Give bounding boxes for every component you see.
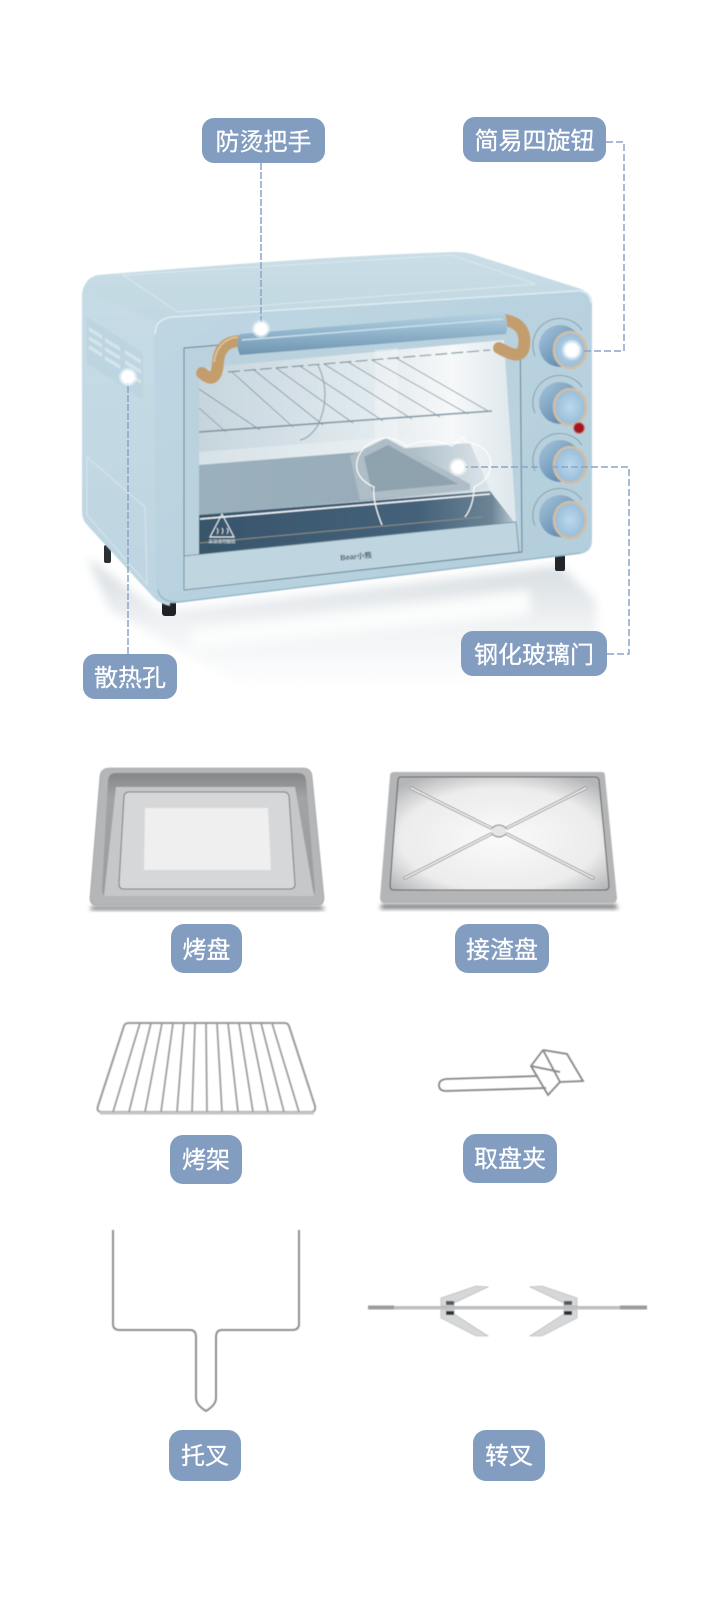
door glass (199, 340, 516, 556)
callout: heat-proof handle: 防烫把手 (216, 129, 312, 156)
label: pan clip: 取盘夹 (474, 1146, 546, 1173)
left bronze hook (202, 341, 240, 378)
heat warning icon (208, 514, 236, 545)
glass bottom highlights (200, 494, 490, 519)
callout: vent holes (83, 367, 177, 699)
label: baking tray (171, 924, 242, 973)
oven top (84, 252, 592, 330)
brand logo: Bear小熊 (340, 550, 373, 562)
label: drip tray: 接渣盘 (466, 937, 538, 964)
label: wire rack (170, 1135, 242, 1184)
side vents (87, 317, 143, 400)
pan clip (439, 1050, 583, 1095)
callout: four simple knobs (463, 117, 624, 361)
drip tray (380, 772, 618, 909)
glass bear outline (300, 365, 491, 525)
support fork (113, 1230, 299, 1411)
callout: tempered glass door: 钢化玻璃门 (474, 642, 594, 669)
callout: four simple knobs: 简易四旋钮 (474, 128, 594, 155)
interior shelf (199, 434, 430, 466)
knobs (533, 318, 586, 538)
callout: tempered glass door (448, 457, 629, 676)
baking tray (90, 768, 325, 910)
oven side (82, 276, 170, 606)
callout: heat-proof handle (202, 118, 325, 339)
oven feet (104, 545, 565, 616)
drip tray X ridge (405, 788, 593, 878)
knob 4 (533, 488, 586, 538)
label: baking tray: 烤盘 (182, 937, 230, 964)
door handle (202, 312, 524, 378)
heat warning icon: 高温请勿触碰 (208, 538, 236, 545)
door bottom band (184, 522, 519, 590)
interior vertical light (375, 348, 398, 442)
interior dark base (199, 491, 514, 556)
oven reflection (88, 558, 596, 690)
knob 1 (533, 318, 586, 368)
indicator light (574, 422, 584, 434)
label: rotisserie fork (473, 1430, 545, 1481)
rotisserie fork (368, 1286, 647, 1336)
panel: oven product image (82, 252, 596, 690)
label: support fork: 托叉 (181, 1443, 229, 1470)
knob 3 (533, 433, 586, 483)
interior lower cavity (199, 443, 490, 515)
oven front (154, 290, 592, 603)
label: rotisserie fork: 转叉 (485, 1443, 533, 1470)
callout: vent holes: 散热孔 (94, 665, 166, 692)
label: wire rack: 烤架 (182, 1147, 230, 1174)
label: support fork (169, 1430, 241, 1481)
baking tray inside (350, 438, 470, 500)
handle bar (238, 312, 507, 355)
label: drip tray (455, 924, 549, 973)
wire rack (98, 1023, 315, 1113)
right bronze hook (499, 320, 524, 355)
label: pan clip (463, 1134, 557, 1183)
oven rack (199, 350, 492, 432)
knob 2 (533, 375, 586, 425)
oven door (184, 320, 522, 590)
